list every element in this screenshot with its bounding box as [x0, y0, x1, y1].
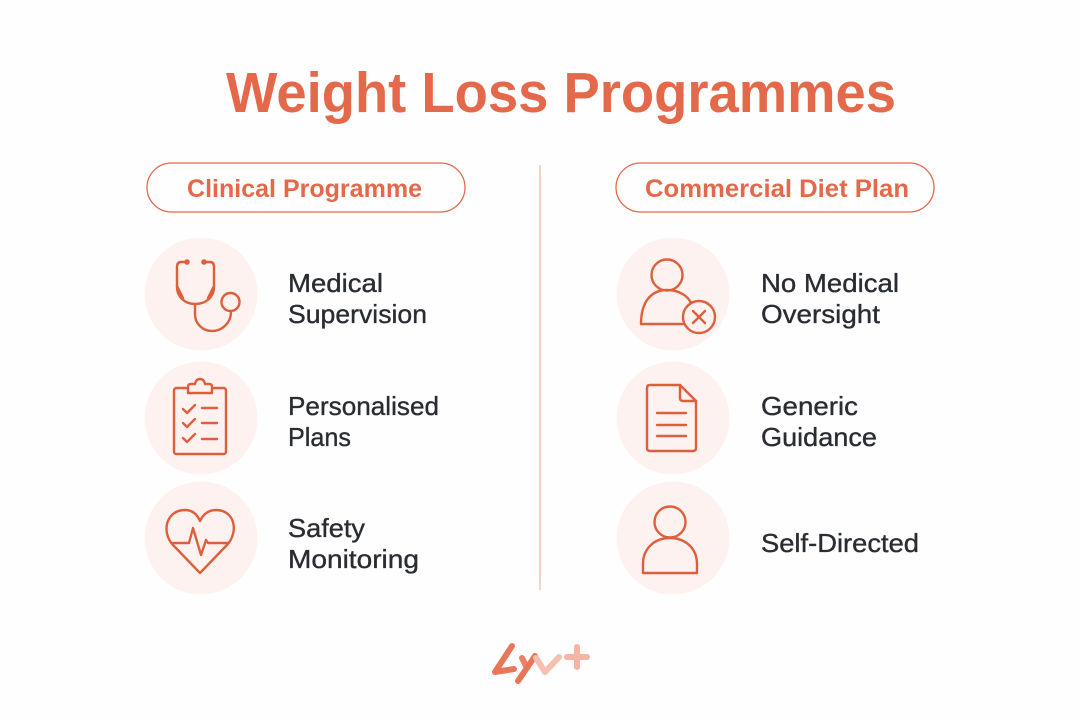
label: no medical oversight: No Medical — [761, 268, 899, 298]
heading: commercial diet plan — [616, 163, 934, 212]
heading: clinical programme: Clinical Programme — [187, 175, 422, 203]
label: generic guidance: Guidance — [761, 422, 877, 452]
logo — [495, 646, 587, 681]
icon: clipboard — [144, 362, 258, 474]
label: safety monitoring: Monitoring — [288, 544, 419, 574]
label: generic guidance: Generic — [761, 391, 858, 421]
label: no medical oversight: Oversight — [761, 299, 881, 329]
icon: person — [616, 482, 730, 594]
label: medical supervision: Supervision — [288, 299, 427, 329]
icon: document — [616, 362, 730, 474]
heading: commercial diet plan: Commercial Diet Plan — [645, 175, 909, 203]
title: Weight Loss Programmes — [226, 61, 896, 125]
icon: stethoscope — [144, 238, 258, 350]
label: safety monitoring: Safety — [288, 513, 365, 543]
heading: clinical programme — [147, 163, 465, 212]
label: medical supervision: Medical — [288, 268, 383, 298]
icon: heart with pulse — [144, 482, 258, 594]
label: self-directed: Self-Directed — [761, 528, 919, 558]
label: personalised plans: Plans — [288, 422, 351, 452]
label: personalised plans: Personalised — [288, 391, 439, 421]
icon: person with cross — [616, 238, 730, 350]
panel: clinical programme — [144, 163, 465, 594]
panel: commercial diet plan — [616, 163, 934, 594]
